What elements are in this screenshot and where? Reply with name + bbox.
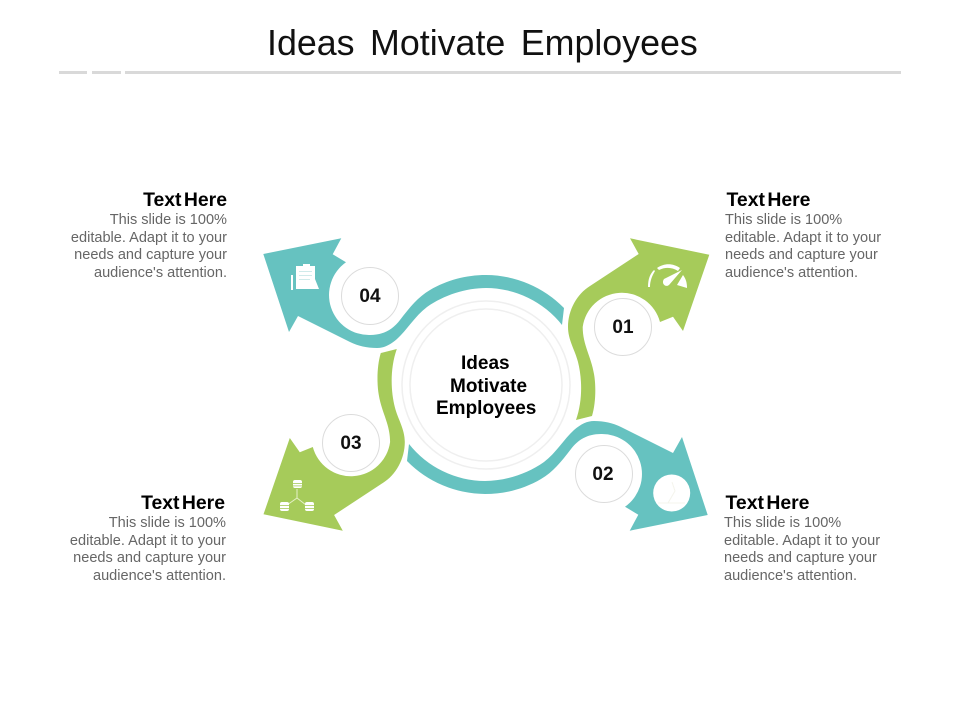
text block: top right: editable. Adapt it to your (725, 230, 881, 246)
number badge 02 (576, 446, 632, 502)
icon: database network (280, 480, 314, 511)
center label (436, 353, 536, 419)
icon: pie circle (653, 474, 690, 512)
number badge 01 (594, 298, 652, 356)
text block: top right: audience's attention. (725, 265, 858, 281)
text block: top left: needs and capture your (74, 247, 227, 263)
text block: bottom right: Text Here (726, 492, 810, 514)
text block: bottom right: This slide is 100% (724, 515, 841, 531)
center label: Ideas (461, 353, 510, 374)
text block: bottom left: This slide is 100% (109, 515, 226, 531)
center label: Employees (436, 398, 536, 419)
text block: top left: editable. Adapt it to your (71, 230, 227, 246)
text block: bottom left: audience's attention. (93, 568, 226, 584)
number badge 04 (342, 268, 398, 324)
arrow 01 green (568, 238, 709, 420)
text block: top left (71, 189, 227, 281)
text block: bottom right: needs and capture your (724, 550, 877, 566)
text block: bottom right: editable. Adapt it to your (724, 533, 880, 549)
text block: top right (725, 189, 881, 281)
number badge 01: 01 (612, 317, 634, 338)
icon: clipboard document (291, 264, 319, 290)
text block: bottom right (724, 492, 880, 584)
title underline (59, 71, 901, 74)
text block: bottom left (70, 492, 226, 584)
text block: top left: audience's attention. (94, 265, 227, 281)
text block: top right: Text Here (726, 189, 811, 211)
arrow 04 teal (263, 238, 564, 348)
icon: gauge (648, 264, 687, 288)
text block: bottom right: audience's attention. (724, 568, 857, 584)
number badge 04: 04 (359, 286, 381, 307)
number badge 02: 02 (592, 464, 614, 485)
text block: top right: needs and capture your (725, 247, 878, 263)
arrow 03 green (264, 349, 405, 531)
center circle (402, 301, 570, 469)
number badge 03: 03 (340, 433, 362, 454)
text block: bottom left: Text Here (141, 492, 225, 514)
number badge 03 (322, 414, 380, 472)
center label: Motivate (450, 376, 527, 397)
text block: bottom left: needs and capture your (73, 550, 226, 566)
arrow 02 teal (407, 421, 708, 531)
text block: bottom left: editable. Adapt it to your (70, 533, 226, 549)
title: Ideas Motivate Employees (267, 23, 698, 63)
text block: top left: This slide is 100% (110, 212, 227, 228)
text block: top left: Text Here (143, 189, 227, 211)
text block: top right: This slide is 100% (725, 212, 842, 228)
